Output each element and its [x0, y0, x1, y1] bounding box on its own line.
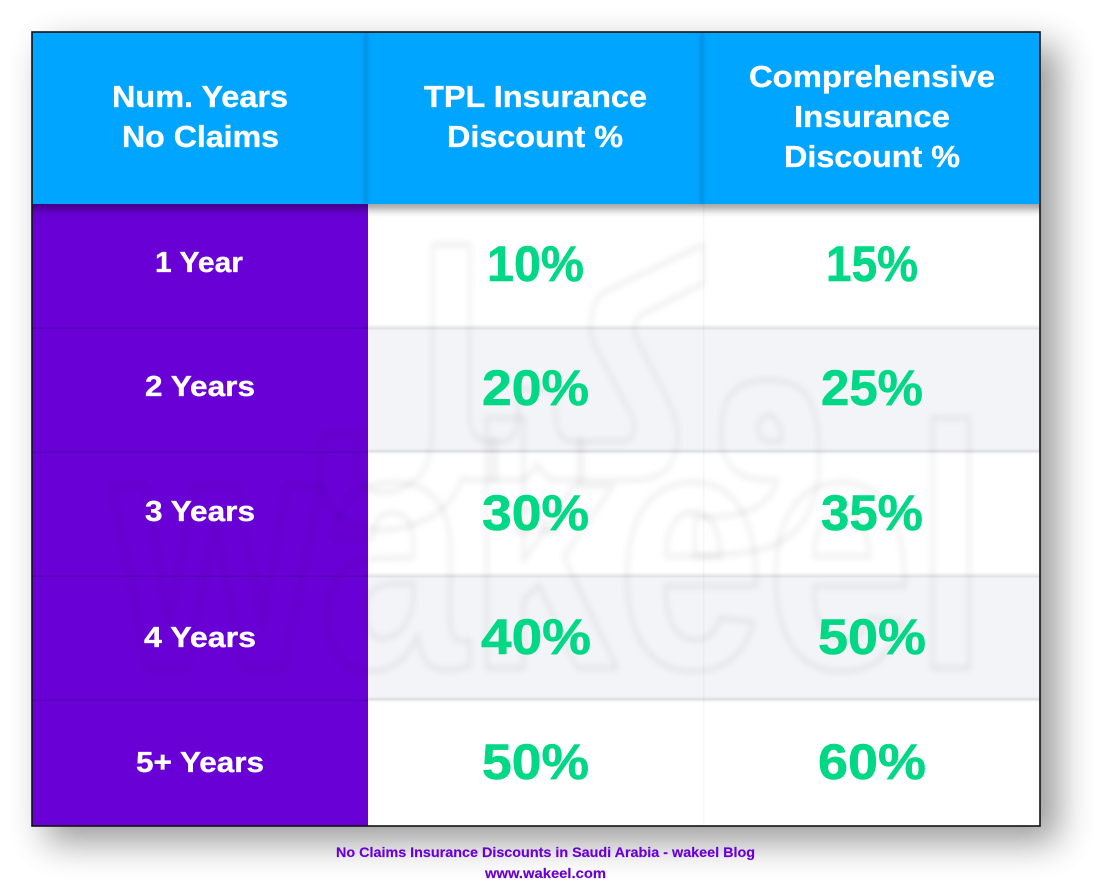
rows background	[367, 204, 1040, 826]
heading: number of years: Num. Years	[112, 79, 288, 114]
row: 5+ years: 60%	[818, 734, 926, 790]
header column shadows	[364, 32, 704, 204]
heading: comprehensive insurance discount	[749, 59, 995, 174]
row: 1 year: 15%	[826, 236, 918, 292]
row dividers	[32, 326, 1040, 701]
row: 2 years	[145, 360, 923, 416]
heading: number of years: No Claims	[122, 119, 279, 154]
header shadow	[20, 198, 1060, 209]
row: 3 years: 35%	[821, 485, 923, 541]
watermark: wakeel logo	[167, 243, 970, 672]
row: 2 years: 25%	[821, 360, 923, 416]
row: 4 years	[144, 609, 926, 665]
caption: www.wakeel.com	[484, 865, 606, 881]
row: 2 years: 20%	[482, 360, 589, 416]
row: 4 years: 40%	[481, 609, 591, 665]
row: 3 years	[145, 485, 923, 541]
row: 5+ years: 5+ Years	[136, 747, 264, 779]
header background	[32, 32, 1040, 204]
row: 3 years: 30%	[482, 485, 589, 541]
column divider	[703, 204, 704, 826]
heading: TPL insurance discount: Discount %	[447, 119, 623, 154]
row: 5+ years	[136, 734, 926, 790]
first column background	[32, 204, 368, 826]
heading: comprehensive insurance discount: Discount %	[784, 139, 960, 174]
row: 5+ years: 50%	[482, 734, 589, 790]
heading: comprehensive insurance discount: Insurance	[794, 99, 950, 134]
row: 2 years: 2 Years	[145, 371, 255, 403]
heading: comprehensive insurance discount: Comprehensive	[749, 59, 995, 94]
heading: number of years	[112, 79, 288, 154]
heading: TPL insurance discount: TPL Insurance	[424, 79, 647, 114]
row: 1 year: 10%	[487, 236, 584, 292]
caption: No Claims Insurance Discounts in Saudi Arabia - wakeel Blog	[336, 844, 755, 860]
row: 3 years: 3 Years	[145, 496, 255, 528]
caption	[336, 844, 755, 881]
row: 1 year	[155, 236, 918, 292]
row: 1 year: 1 Year	[155, 247, 243, 279]
row: 4 years: 4 Years	[144, 622, 256, 654]
row: 4 years: 50%	[818, 609, 926, 665]
heading: TPL insurance discount	[424, 79, 647, 154]
watermark: wakeel logo: وكيل	[305, 193, 835, 558]
